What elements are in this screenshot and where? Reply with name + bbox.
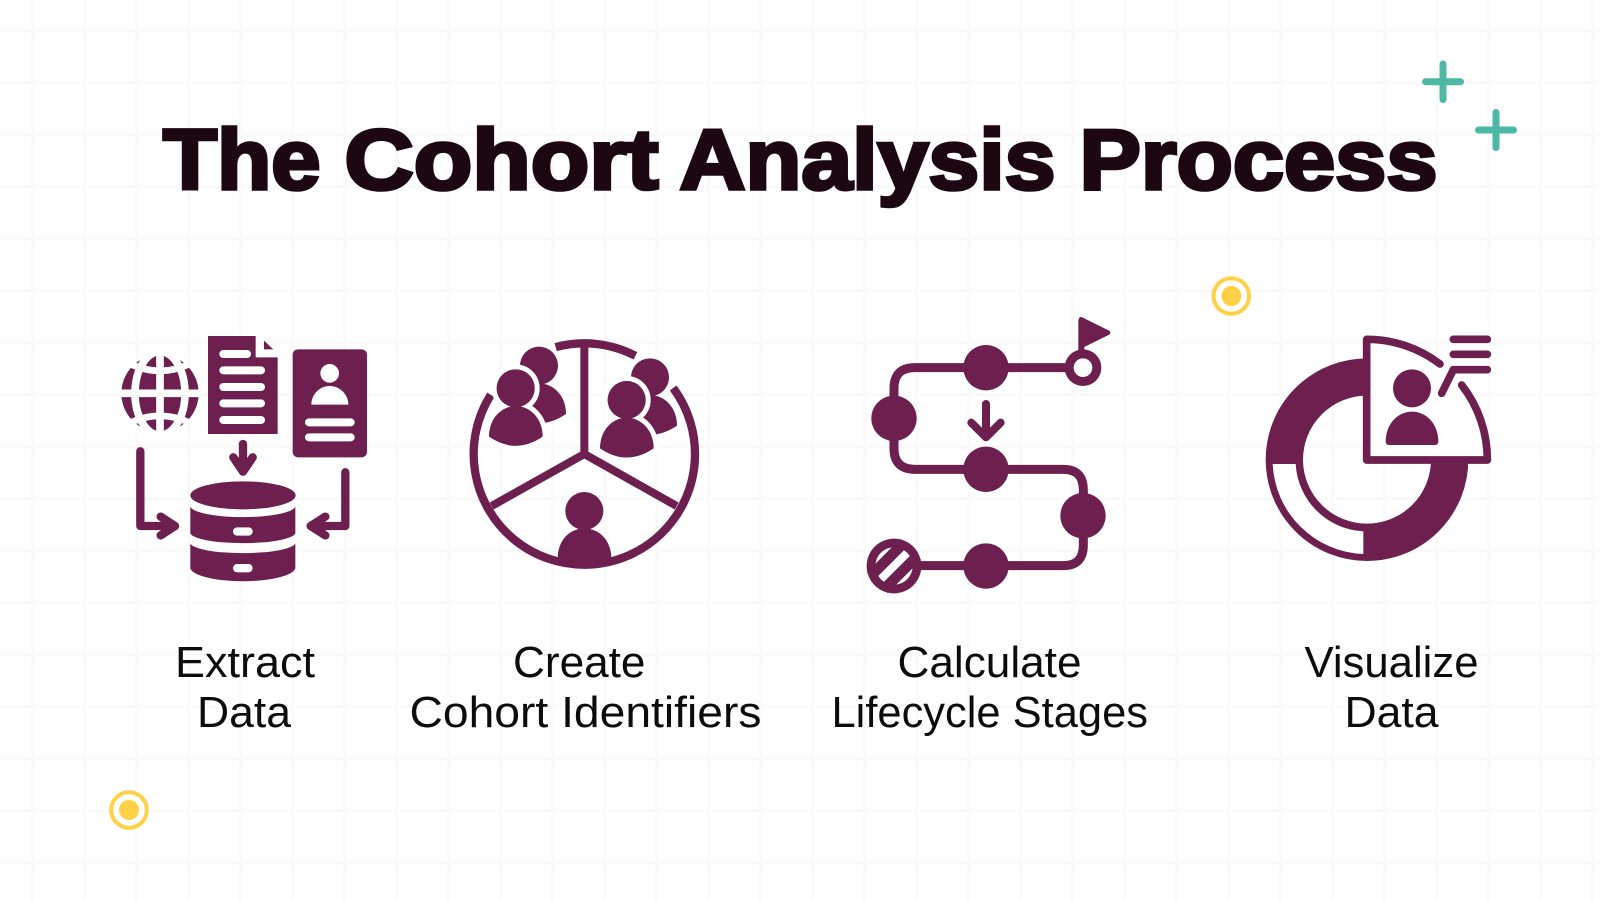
pie outline <box>474 343 695 565</box>
path nodes <box>871 345 1106 589</box>
person <box>1386 369 1438 445</box>
label: calculate lifecycle stages: Calculate <box>898 639 1082 687</box>
arrow: globe to database <box>140 451 175 535</box>
icon: plus lower <box>1478 112 1514 148</box>
icon: yellow target upper <box>1214 278 1249 314</box>
icon: database <box>190 481 296 581</box>
label: visualize data: Visualize <box>1304 639 1478 687</box>
arrow: document to database <box>233 444 253 472</box>
icon: plus top <box>1426 64 1460 100</box>
label: extract data: Extract <box>175 639 315 687</box>
icon: profile card <box>293 349 367 457</box>
icon: lifecycle path <box>867 319 1108 593</box>
donut chart <box>1273 377 1450 554</box>
title: Process <box>1080 113 1438 208</box>
icon: document <box>208 336 278 434</box>
label: create cohort identifiers: Cohort Identifiers <box>410 689 762 737</box>
arrow: card to database <box>311 472 345 535</box>
icon: cohort identifiers <box>474 343 695 565</box>
pie slice <box>1367 339 1487 460</box>
title: The <box>163 113 320 208</box>
label: create cohort identifiers: Create <box>513 639 646 687</box>
title <box>163 113 1438 208</box>
label: calculate lifecycle stages: Lifecycle Stages <box>832 689 1148 737</box>
icon: yellow target lower <box>111 792 147 828</box>
title: Analysis <box>680 113 1056 208</box>
label: extract data <box>175 639 315 737</box>
label: visualize data: Data <box>1344 689 1439 737</box>
person bottom <box>558 492 611 563</box>
callout lines <box>1442 339 1487 393</box>
label: calculate lifecycle stages <box>832 639 1148 737</box>
title: Cohort <box>344 113 658 208</box>
person group left <box>489 347 566 446</box>
winding path line <box>894 368 1083 566</box>
label: visualize data <box>1304 639 1478 737</box>
label: create cohort identifiers <box>410 639 762 737</box>
person group right <box>600 358 677 457</box>
icon: globe <box>122 356 198 431</box>
flag marker <box>1069 319 1108 381</box>
label: extract data: Data <box>197 689 292 737</box>
arrow: down <box>971 404 1001 437</box>
icon: visualize data <box>1273 339 1487 554</box>
icon: extract data <box>117 336 367 581</box>
start striped circle <box>867 539 921 593</box>
